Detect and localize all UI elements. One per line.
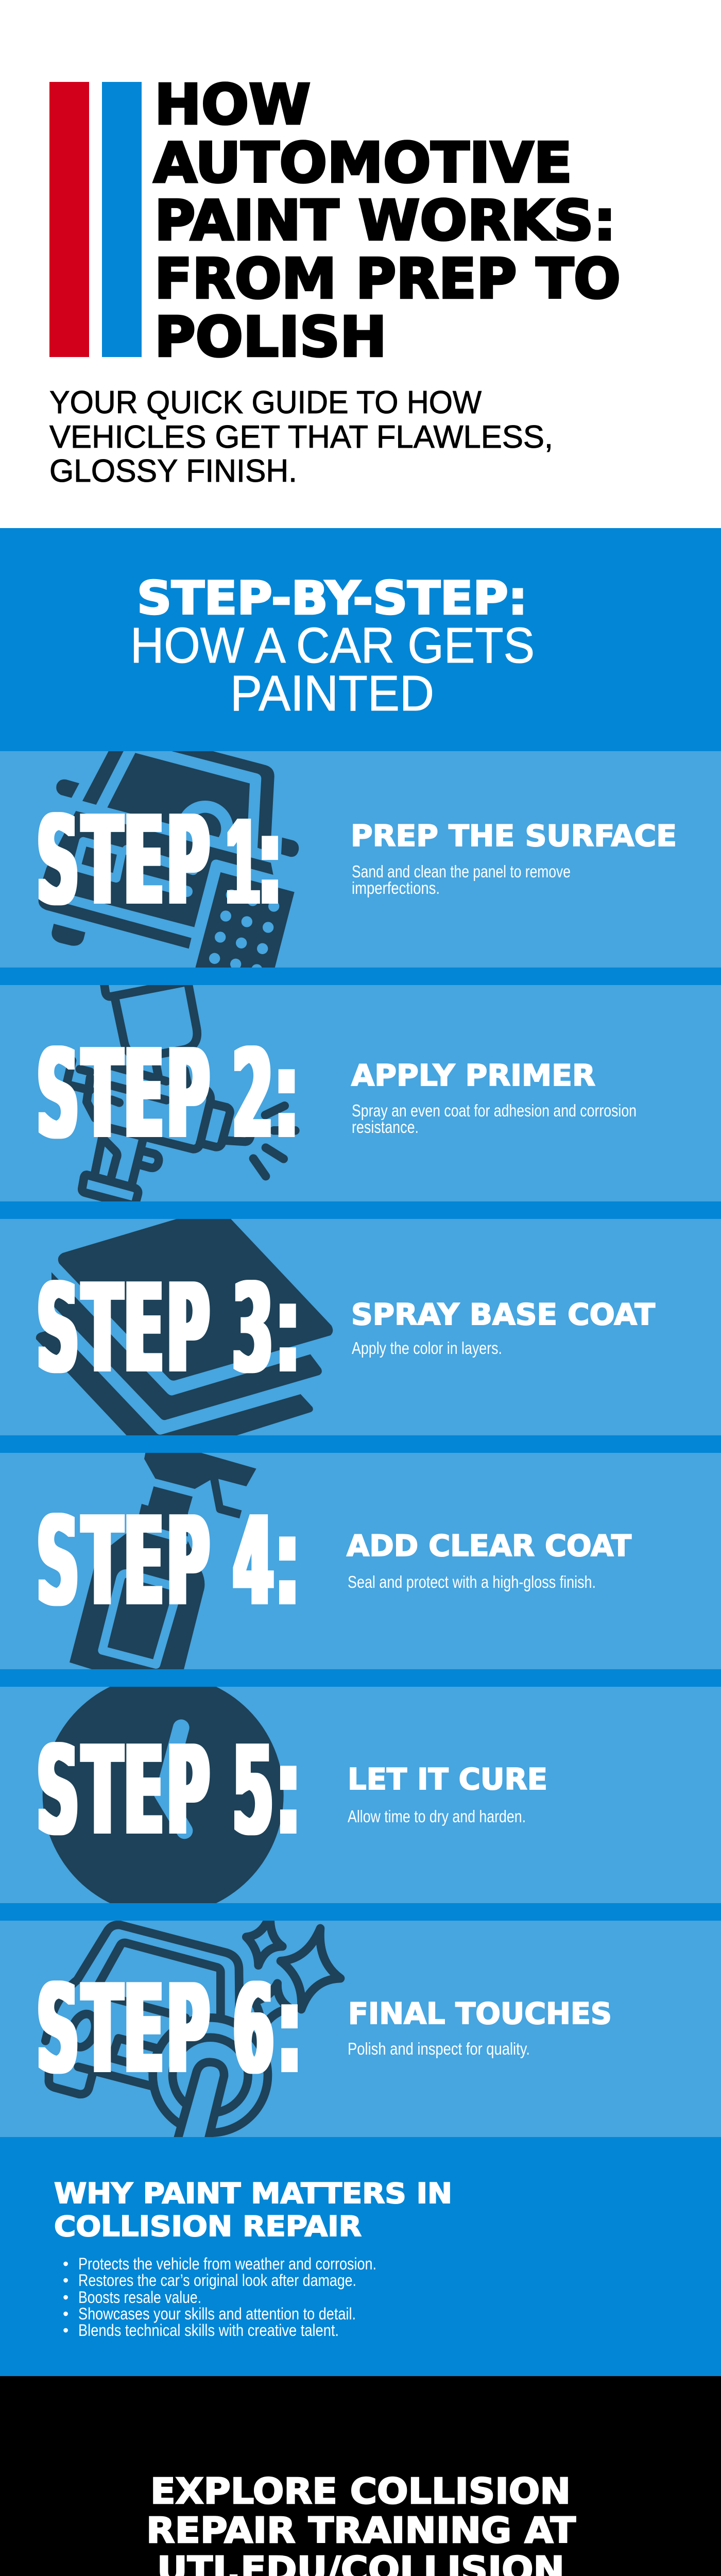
list: reasons: Restores the car’s original look after damage. bbox=[78, 2271, 356, 2290]
icon: spray gun bbox=[66, 981, 295, 1206]
icon: clock bbox=[42, 1687, 284, 1903]
step number: 2: bbox=[233, 1023, 298, 1165]
section heading: STEP-BY-STEP: bbox=[137, 572, 527, 624]
list: reasons: Blends technical skills with creative talent. bbox=[78, 2321, 339, 2340]
step number bbox=[37, 1258, 299, 1400]
step number: STEP bbox=[37, 1490, 209, 1633]
step description bbox=[352, 1101, 637, 1137]
subtitle bbox=[49, 385, 553, 489]
step description: Allow time to dry and harden. bbox=[348, 1807, 526, 1826]
heading: why paint matters bbox=[54, 2177, 452, 2243]
subtitle: VEHICLES GET THAT FLAWLESS, bbox=[49, 419, 553, 455]
panel: call to action bbox=[0, 2376, 721, 2576]
subtitle: YOUR QUICK GUIDE TO HOW bbox=[49, 385, 482, 420]
step number: STEP bbox=[37, 1958, 209, 2100]
step heading: SPRAY BASE COAT bbox=[351, 1298, 655, 1332]
list: reasons: • bbox=[63, 2321, 68, 2340]
step description: resistance. bbox=[352, 1117, 419, 1137]
step number: 5: bbox=[233, 1720, 300, 1862]
panel: step 5 bbox=[0, 1687, 721, 1903]
step number: STEP bbox=[37, 1258, 209, 1400]
step number: STEP bbox=[37, 1023, 209, 1165]
step description: Seal and protect with a high-gloss finish. bbox=[348, 1572, 596, 1591]
icon: paint layers bbox=[36, 1218, 336, 1435]
icon: spray bottle bbox=[70, 1452, 256, 1670]
list: reasons: • bbox=[63, 2255, 68, 2273]
step number: STEP bbox=[37, 1720, 209, 1862]
step heading: APPLY PRIMER bbox=[351, 1059, 595, 1093]
call to action text bbox=[146, 2471, 576, 2576]
step description: Apply the color in layers. bbox=[352, 1338, 502, 1358]
title: POLISH bbox=[154, 306, 387, 369]
call to action text: REPAIR TRAINING AT bbox=[146, 2510, 576, 2551]
call to action text: EXPLORE COLLISION bbox=[150, 2471, 571, 2512]
step description: imperfections. bbox=[352, 878, 440, 897]
section heading: HOW A CAR GETS bbox=[130, 617, 535, 673]
title bbox=[153, 73, 621, 369]
heading: why paint matters: COLLISION REPAIR bbox=[54, 2210, 362, 2243]
step description: Spray an even coat for adhesion and corrosion bbox=[352, 1101, 637, 1120]
step number: 3: bbox=[233, 1258, 299, 1400]
title: FROM PREP TO bbox=[154, 247, 621, 311]
step number: 6: bbox=[233, 1958, 301, 2100]
step number: 1: bbox=[227, 790, 281, 932]
step number: STEP bbox=[37, 790, 209, 932]
panel: step 3 bbox=[0, 1218, 721, 1435]
step description: Sand and clean the panel to remove bbox=[352, 862, 571, 881]
list: reasons: • bbox=[63, 2288, 68, 2307]
list: reasons: • bbox=[63, 2304, 68, 2323]
list: reasons bbox=[63, 2255, 376, 2340]
logo stripes bbox=[49, 82, 142, 357]
panel: step 4 bbox=[0, 1452, 721, 1670]
step number: 4: bbox=[233, 1490, 299, 1633]
list: reasons: • bbox=[63, 2271, 68, 2290]
step heading: LET IT CURE bbox=[348, 1762, 547, 1797]
section heading bbox=[130, 572, 535, 721]
title: PAINT WORKS: bbox=[154, 189, 616, 253]
background: white header bbox=[0, 0, 721, 528]
step description: Polish and inspect for quality. bbox=[348, 2039, 530, 2058]
step number bbox=[37, 1720, 300, 1862]
icon: car with sanding block bbox=[39, 750, 299, 975]
icon: polishing car bbox=[45, 1914, 340, 2142]
list: reasons: Showcases your skills and attention to detail. bbox=[78, 2304, 356, 2323]
title: AUTOMOTIVE bbox=[153, 131, 572, 195]
title: HOW bbox=[154, 73, 311, 137]
subtitle: GLOSSY FINISH. bbox=[49, 453, 297, 489]
section heading: PAINTED bbox=[230, 665, 434, 721]
list: reasons: Boosts resale value. bbox=[78, 2288, 201, 2307]
step number bbox=[37, 1958, 301, 2100]
list: reasons: Protects the vehicle from weather and corrosion. bbox=[78, 2255, 376, 2273]
panel: step 2 bbox=[0, 981, 721, 1206]
step description bbox=[352, 862, 571, 897]
panel: blue section background bbox=[0, 528, 721, 2376]
step number bbox=[37, 1490, 299, 1633]
step number bbox=[37, 1023, 298, 1165]
heading: why paint matters: WHY PAINT MATTERS IN bbox=[54, 2177, 452, 2210]
step heading: FINAL TOUCHES bbox=[348, 1997, 612, 2031]
panel: step 6 bbox=[0, 1914, 721, 2142]
step heading: ADD CLEAR COAT bbox=[347, 1529, 631, 1563]
step heading: PREP THE SURFACE bbox=[351, 819, 677, 853]
panel: step 1 bbox=[0, 750, 721, 975]
